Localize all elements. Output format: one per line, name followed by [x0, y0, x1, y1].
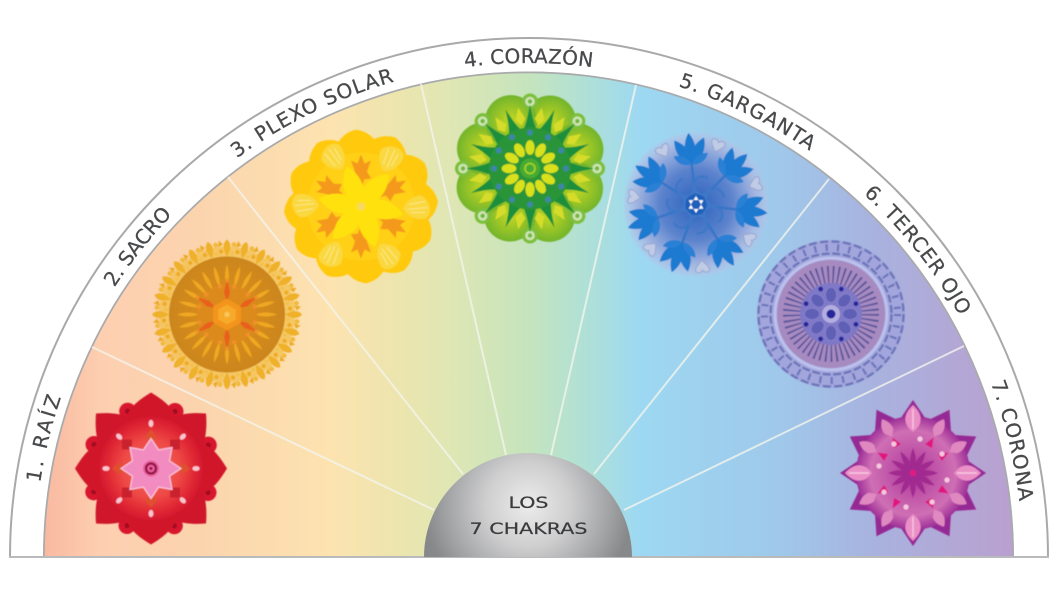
mandala: root chakra, red — [75, 392, 227, 544]
mandala: heart chakra, green — [446, 84, 614, 253]
label: 5. Garganta: 5. GARGANTA — [680, 72, 814, 151]
mandala: third eye chakra, violet — [757, 240, 905, 388]
base line — [9, 556, 1049, 558]
central hub: Los 7 Chakras: LOS — [508, 493, 548, 512]
mandala: throat chakra, blue — [622, 131, 770, 279]
rainbow background fan — [44, 73, 1013, 557]
label: 1. Raíz: 1. RAÍZ — [26, 394, 61, 480]
mandala: sacral chakra, orange — [152, 240, 302, 390]
label: 6. Tercer Ojo: 6. TERCER OJO — [866, 186, 970, 313]
label: 7. Corona: 7. CORONA — [992, 379, 1034, 502]
label: 2. Sacro: 2. SACRO — [104, 208, 170, 286]
mandala: crown chakra, purple — [840, 400, 986, 546]
label: 3. Plexo Solar: 3. PLEXO SOLAR — [230, 69, 394, 158]
central hub: Los 7 Chakras: 7 CHAKRAS — [470, 519, 588, 538]
label: 4. Corazón: 4. CORAZÓN — [465, 46, 592, 67]
mandala: solar plexus chakra, yellow — [281, 127, 441, 286]
central hub: Los 7 Chakras — [424, 453, 632, 557]
